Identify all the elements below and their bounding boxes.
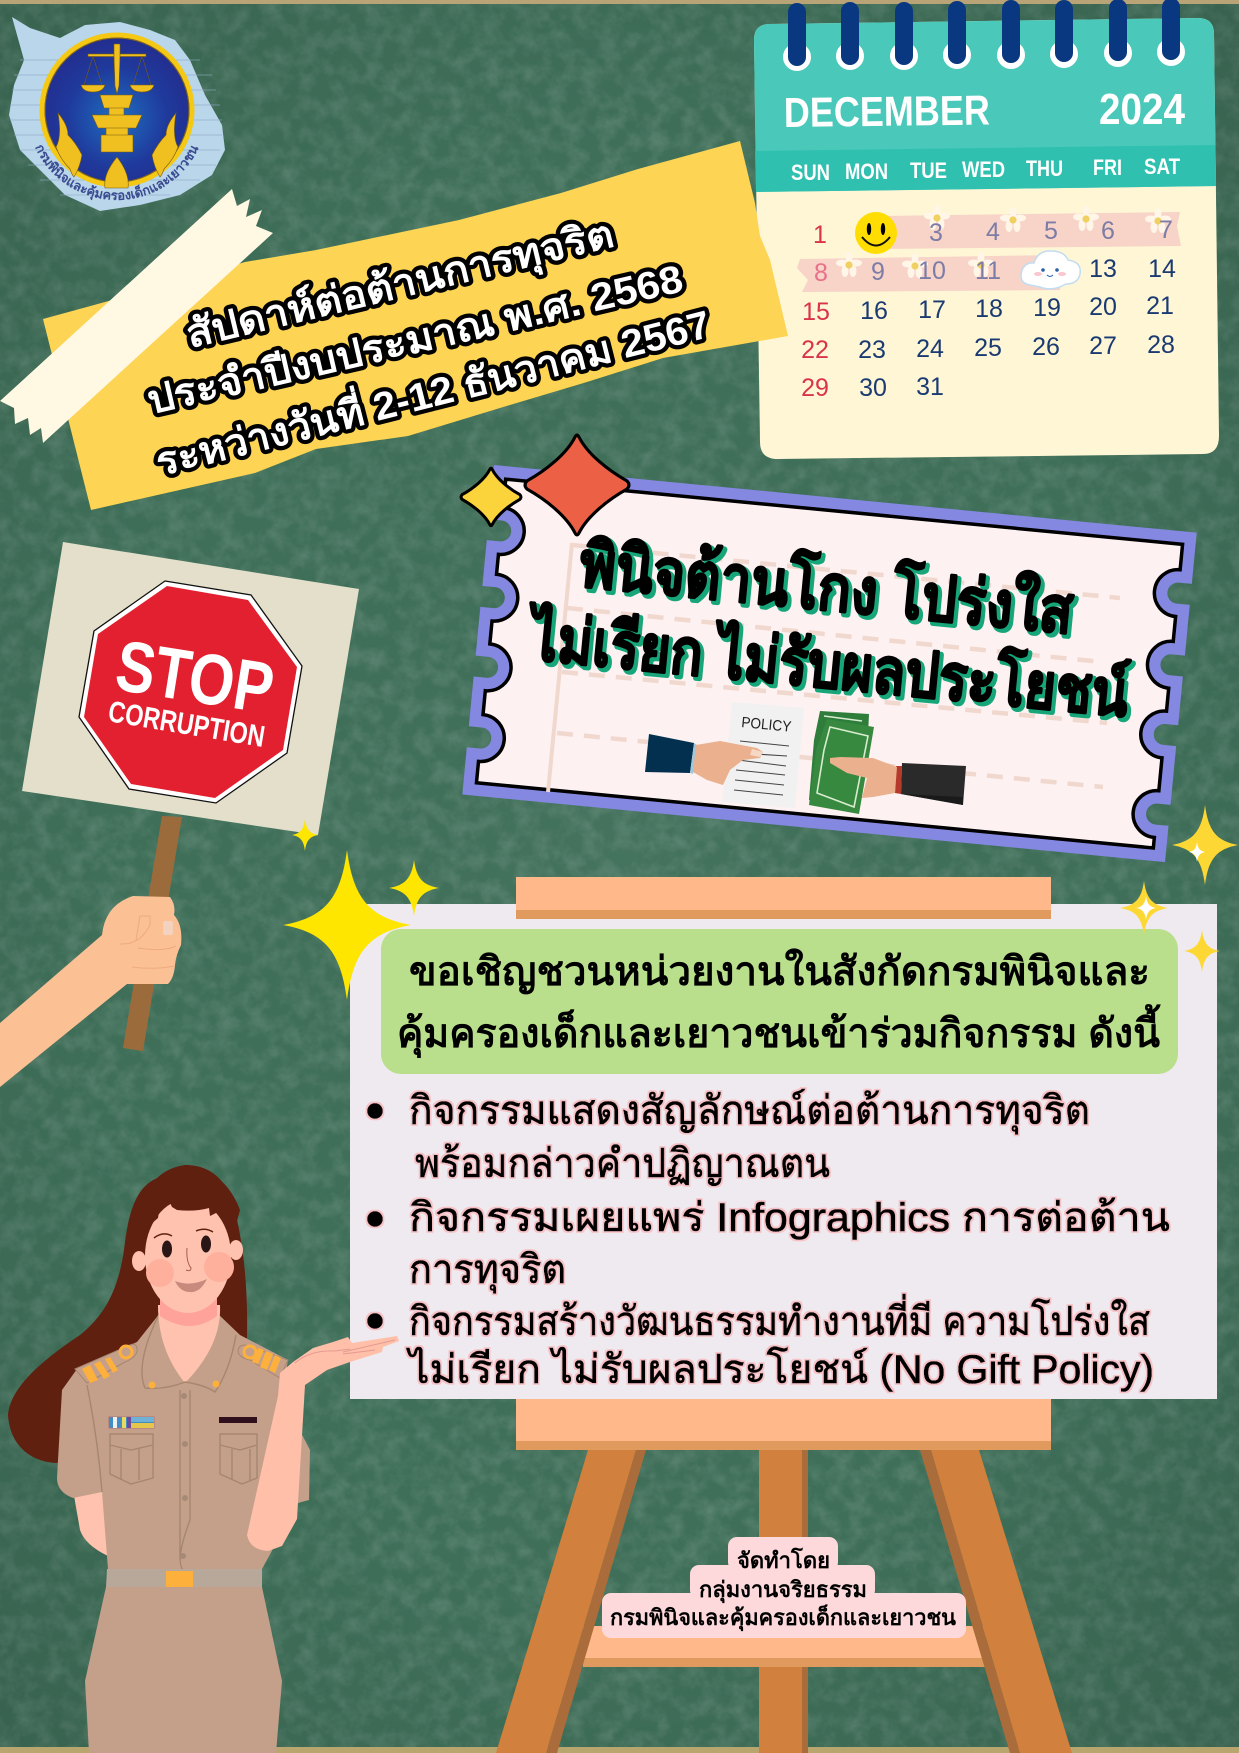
date numbers: 22 (801, 336, 829, 364)
torn cream tape (0, 189, 273, 443)
date numbers: 29 (801, 374, 829, 402)
invitation heading box: คุ้มครองเด็กและเยาวชนเข้าร่วมกิจกรรม ดังนี้ (397, 1004, 1162, 1059)
neck shadow (160, 1290, 217, 1326)
weekday labels: SAT (1144, 154, 1180, 179)
activity 1 (368, 1088, 1090, 1186)
organiser label (602, 1537, 966, 1638)
date numbers: 18 (975, 295, 1003, 323)
ticket body with scalloped edges (476, 479, 1183, 848)
icon: hand with sleeve right (830, 757, 966, 805)
calendar (754, 0, 1219, 459)
organiser label: กรมพินิจและคุ้มครองเด็กและเยาวชน (610, 1603, 956, 1632)
date numbers: 1 (813, 221, 827, 249)
weekday labels: WED (962, 157, 1005, 182)
chest skin (158, 1305, 220, 1383)
ruled notebook lines (548, 543, 1120, 792)
activity 1: พร้อมกล่าวคำปฏิญาณตน (415, 1142, 830, 1186)
date numbers: 19 (1033, 294, 1061, 322)
easel centre leg (759, 1450, 808, 1753)
date numbers: 27 (1089, 332, 1117, 360)
activity 2: การทุจริต (409, 1248, 566, 1294)
weekday labels: FRI (1093, 155, 1122, 180)
banner heading text: ระหว่างวันที่ 2-12 ธันวาคม 2567 (150, 296, 715, 485)
date numbers: 9 (871, 258, 885, 286)
easel left leg (496, 1450, 646, 1753)
date numbers: 8 (814, 259, 828, 287)
month and year: 2024 (1099, 85, 1185, 134)
banner heading text: สัปดาห์ต่อต้านการทุจริต (182, 211, 618, 359)
banner heading text: ประจำปีงบประมาณ พ.ศ. 2568 (143, 258, 687, 423)
easel shelf (583, 1626, 986, 1667)
invitation heading box: ขอเชิญชวนหน่วยงานในสังกัดกรมพินิจและ (409, 948, 1150, 995)
title text: พินิจต้านโกง โปร่งใส (577, 526, 1076, 647)
skirt (85, 1587, 282, 1753)
date numbers (801, 216, 1176, 402)
icon: sparkle near sign (292, 819, 318, 851)
weekday labels (791, 154, 1180, 185)
icon: smiley on day 2 (855, 212, 897, 254)
belt (106, 1569, 262, 1592)
easel top clip (516, 877, 1051, 919)
yellow banner (0, 141, 788, 510)
weekday labels: SUN (791, 160, 830, 185)
date numbers: 11 (975, 257, 1001, 285)
weekday labels: MON (845, 159, 888, 184)
spiral rings (786, 0, 1182, 68)
stop octagon (79, 581, 302, 803)
calendar page (754, 18, 1219, 459)
ticket panel (461, 435, 1183, 848)
activity 2: กิจกรรมเผยแพร่ Infographics การต่อต้าน (409, 1196, 1170, 1240)
date numbers: 16 (860, 297, 888, 325)
easel right leg (920, 1450, 1072, 1753)
face (132, 1165, 243, 1313)
long hair (8, 1165, 247, 1463)
title shadow (526, 529, 1136, 734)
icon: red diamond star (525, 435, 629, 535)
notice board panel (350, 877, 1217, 1399)
weekday labels: TUE (910, 158, 947, 183)
date numbers: 14 (1148, 255, 1176, 283)
sign pole (123, 816, 182, 1051)
logo: department seal (9, 17, 225, 211)
icon: smiling cloud on day 12 (1021, 251, 1080, 289)
icon: hand with sleeve left (645, 734, 763, 785)
date numbers: 10 (918, 257, 946, 285)
arm and fist (0, 896, 181, 1087)
easel lower clip (516, 1399, 1051, 1450)
date numbers: 23 (858, 336, 886, 364)
date numbers: 26 (1032, 333, 1060, 361)
title shadow: พินิจต้านโกง โปร่งใส (580, 529, 1079, 650)
invitation heading box (381, 929, 1178, 1074)
icon: policy document (722, 702, 804, 808)
logo: department seal: กรมพินิจและคุ้มครองเด็กและเยาวชน (35, 145, 198, 200)
date numbers: 17 (918, 296, 946, 324)
date numbers: 4 (986, 218, 1000, 246)
date numbers: 30 (859, 374, 887, 402)
stop octagon: STOP (110, 626, 279, 730)
activity 1: กิจกรรมแสดงสัญลักษณ์ต่อต้านการทุจริต (409, 1088, 1090, 1135)
date numbers: 24 (916, 335, 944, 363)
icon: policy document: POLICY (741, 714, 792, 736)
left arm (73, 1485, 108, 1556)
title text (523, 526, 1133, 731)
date numbers: 3 (929, 219, 943, 247)
washi tape with daisies (797, 205, 1181, 292)
organiser label: กลุ่มงานจริยธรรม (699, 1577, 867, 1604)
month and year: DECEMBER (784, 86, 990, 136)
sign board (22, 542, 359, 835)
woman in khaki uniform (8, 1165, 399, 1753)
sparkle cluster right (1120, 805, 1238, 972)
activity 3: ไม่เรียก ไม่รับผลประโยชน์ (No Gift Policy) (406, 1347, 1154, 1392)
banner heading text (143, 211, 715, 485)
date numbers: 6 (1101, 217, 1115, 245)
organiser label: จัดทำโดย (737, 1547, 830, 1573)
shirt seams, pockets, ribbons (87, 1316, 257, 1570)
date numbers: 13 (1089, 255, 1117, 283)
weekday labels: THU (1026, 156, 1063, 181)
stop octagon: CORRUPTION (106, 695, 267, 754)
date numbers: 25 (974, 334, 1002, 362)
protest sign with arm (0, 542, 359, 1087)
shirt (57, 1313, 310, 1569)
title text: ไม่เรียก ไม่รับผลประโยชน์ (523, 599, 1133, 731)
activity list (368, 1088, 1170, 1392)
date numbers: 21 (1146, 292, 1174, 320)
title shadow: ไม่เรียก ไม่รับผลประโยชน์ (526, 602, 1136, 734)
date numbers: 15 (802, 298, 830, 326)
icon: yellow diamond star (461, 468, 521, 526)
activity 3 (368, 1294, 1154, 1392)
date numbers: 31 (916, 373, 944, 401)
easel (496, 1399, 1072, 1753)
month and year (784, 85, 1185, 136)
activity 3: กิจกรรมสร้างวัฒนธรรมทำงานที่มี ความโปร่งใส (409, 1294, 1150, 1344)
activity 2 (368, 1196, 1170, 1294)
date numbers: 5 (1044, 217, 1058, 245)
icon: banknotes (809, 711, 874, 814)
date numbers: 7 (1159, 216, 1173, 244)
raised arm with open hand (247, 1336, 399, 1551)
epaulettes (75, 1344, 288, 1383)
date numbers: 28 (1147, 331, 1175, 359)
sparkle cluster left (283, 850, 439, 1000)
hair bangs (140, 1165, 240, 1240)
date numbers: 20 (1089, 293, 1117, 321)
